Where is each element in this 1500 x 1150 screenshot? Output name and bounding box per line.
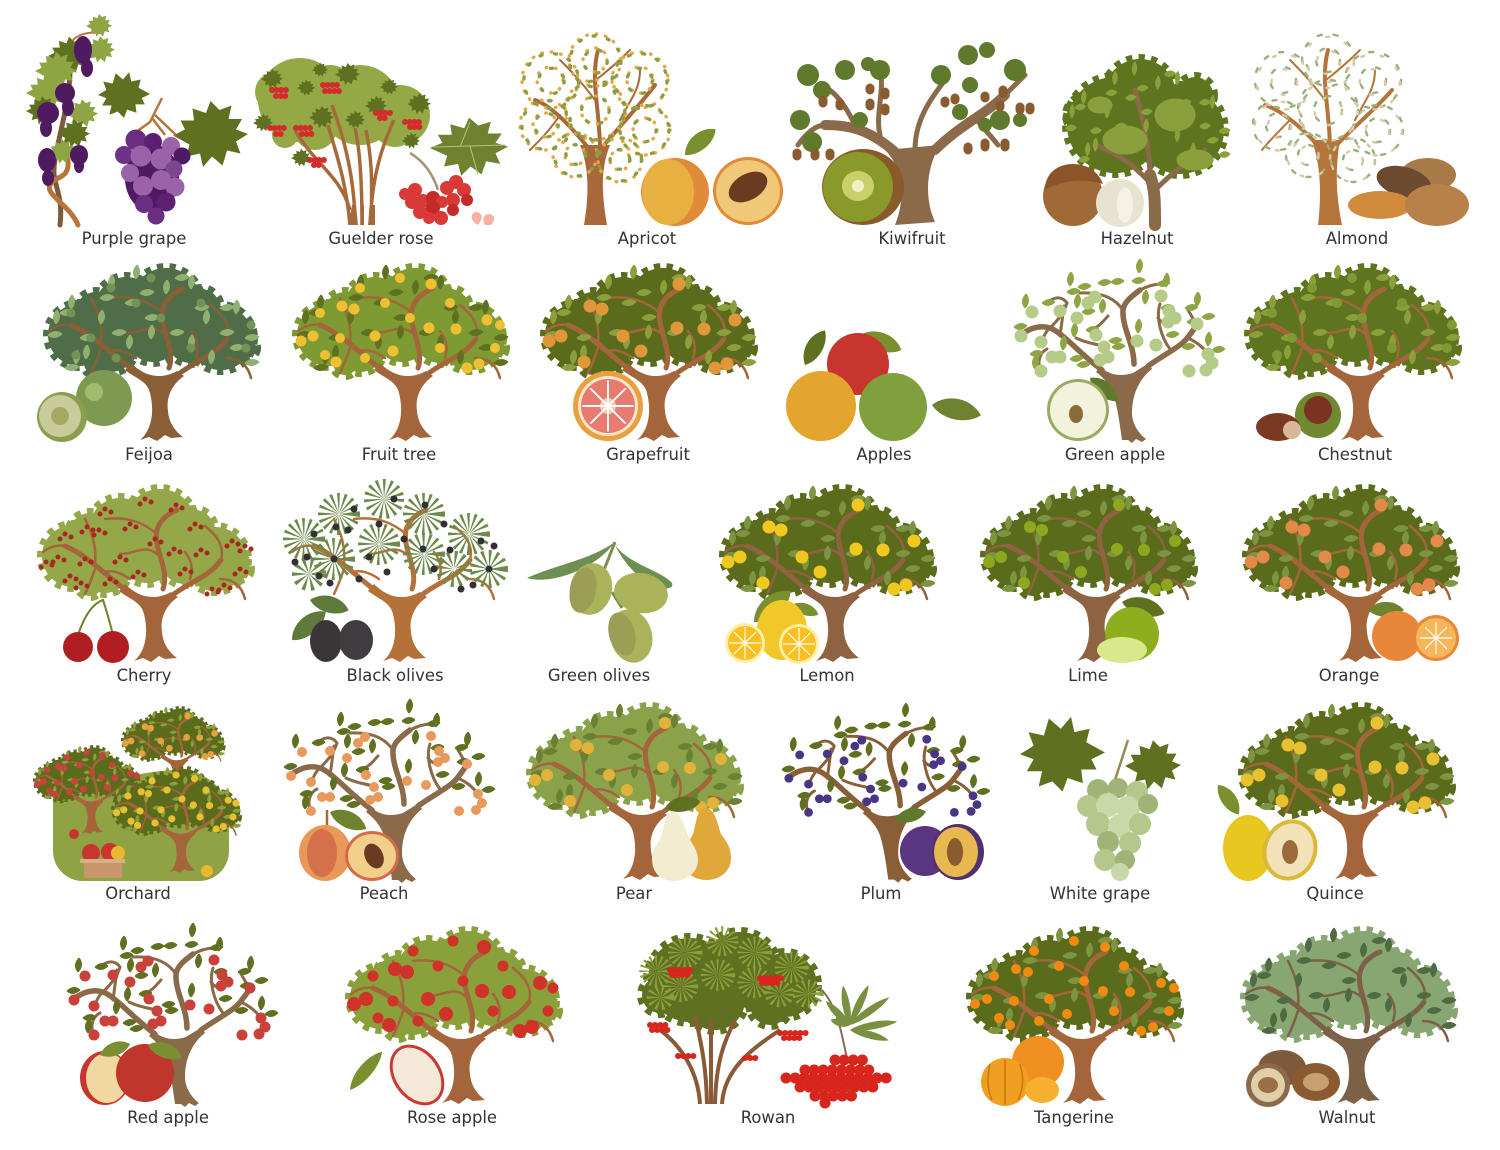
tree art: [297, 266, 507, 441]
plum fruit: [893, 805, 984, 880]
label: Peach: [360, 884, 408, 903]
small grape clusters: [37, 36, 93, 186]
stems: [604, 542, 622, 608]
blossom foliage: [520, 34, 670, 182]
lime fruit: [1097, 592, 1167, 663]
label: Apricot: [618, 229, 677, 248]
red clusters: [650, 970, 808, 1058]
tangerines: [981, 1036, 1064, 1106]
tree: Tangerine: [971, 929, 1181, 1127]
black olives: [286, 591, 373, 662]
tree: Rose apple: [344, 931, 558, 1127]
tree art: [724, 487, 934, 662]
branches: [1262, 50, 1392, 225]
tree art: [350, 931, 558, 1104]
orange fruit: [1368, 602, 1459, 661]
label: Fruit tree: [362, 445, 436, 464]
label: Almond: [1326, 229, 1388, 248]
yellow fruit tree: [114, 768, 240, 873]
label: Rowan: [741, 1108, 795, 1127]
chestnuts: [1256, 392, 1341, 441]
label: Orchard: [105, 884, 171, 903]
branches: [530, 50, 655, 225]
red berries: [399, 175, 473, 225]
pear fruit: [652, 794, 731, 881]
vine leaves: [26, 14, 115, 164]
rowan sprig: [822, 983, 898, 1062]
tree art: [1015, 260, 1224, 443]
hanging kiwis: [797, 88, 1030, 156]
label: Quince: [1306, 884, 1364, 903]
trunk: [1095, 90, 1205, 225]
shrub berries: [270, 85, 423, 165]
tree: Guelder rose: [253, 58, 508, 248]
label: Plum: [861, 884, 901, 903]
almonds: [1348, 158, 1469, 226]
petals: [472, 212, 494, 225]
scene: Orchard: [36, 707, 240, 903]
green apple: [859, 373, 927, 441]
tree art: [545, 266, 755, 441]
label: Rose apple: [407, 1108, 497, 1127]
tree: Green apple: [1015, 260, 1224, 464]
quince fruit: [1212, 780, 1326, 888]
kiwi fruit: [822, 149, 904, 225]
tree art: [48, 266, 258, 441]
tree art: [1243, 705, 1453, 880]
walnuts: [1246, 1050, 1340, 1107]
tree art: [531, 705, 741, 880]
tree: Hazelnut: [1043, 59, 1229, 248]
lighter foliage: [1066, 63, 1229, 170]
olive leaves: [527, 542, 672, 589]
stems: [295, 105, 394, 225]
tree: Apricot: [520, 34, 783, 248]
label: Tangerine: [1033, 1108, 1114, 1127]
cherries: [63, 600, 129, 663]
tree art: [285, 700, 494, 883]
tree: Peach: [285, 700, 494, 903]
label: Green apple: [1065, 445, 1165, 464]
tree: Cherry: [41, 489, 251, 685]
tree art: [41, 489, 251, 662]
tree art: [68, 924, 277, 1107]
label: Lime: [1068, 666, 1108, 685]
apple tree: [36, 746, 140, 834]
tree: Pear: [531, 705, 741, 903]
shrub leaves: [253, 63, 431, 166]
label: White grape: [1050, 884, 1150, 903]
label: Apples: [856, 445, 912, 464]
vine trunk: [49, 33, 100, 225]
kiwi leaves: [790, 42, 1027, 152]
label: Guelder rose: [328, 229, 434, 248]
tree art: [292, 489, 498, 662]
tree art: [1247, 487, 1457, 662]
canopy: [642, 932, 817, 1030]
label: Red apple: [127, 1108, 209, 1127]
big grape bunch: [115, 130, 190, 224]
label: Orange: [1319, 666, 1379, 685]
label: Feijoa: [125, 445, 173, 464]
tree: Rowan: [642, 932, 898, 1127]
label: Kiwifruit: [878, 229, 946, 248]
canopy: [1067, 59, 1224, 174]
stems: [660, 1015, 780, 1104]
leaves: [797, 326, 983, 425]
tree: Red apple: [68, 924, 277, 1127]
tree art: [985, 487, 1195, 662]
group: Green olives: [527, 542, 672, 685]
tree: Purple grape: [26, 14, 248, 248]
tree: Walnut: [1245, 929, 1455, 1127]
apricot fruit: [641, 122, 783, 226]
green hill: [53, 770, 229, 881]
tree: Fruit tree: [297, 266, 507, 464]
sparse leaves: [1253, 34, 1403, 182]
grape leaves: [1020, 717, 1181, 792]
tree: Plum: [783, 704, 989, 903]
label: Pear: [616, 884, 652, 903]
tree: Black olives: [286, 489, 498, 685]
tree art: [1245, 929, 1455, 1104]
grapefruit: [573, 371, 643, 441]
white grape bunch: [1077, 778, 1158, 881]
label: Grapefruit: [606, 445, 690, 464]
group: Apples: [786, 326, 983, 464]
big grape leaves: [173, 101, 248, 167]
lemons: [725, 583, 820, 664]
label: Lemon: [799, 666, 855, 685]
label: Walnut: [1319, 1108, 1376, 1127]
tree: Quince: [1212, 705, 1453, 903]
label: Green olives: [548, 666, 650, 685]
pale leaflets: [647, 934, 815, 1003]
tree: Chestnut: [1249, 266, 1459, 464]
red apple: [827, 333, 889, 395]
yellow apple: [786, 371, 856, 441]
tree art: [971, 929, 1181, 1104]
peach fruit: [299, 804, 399, 881]
tree: Lemon: [724, 487, 934, 685]
olives: [565, 559, 671, 668]
basket of fruit: [80, 843, 125, 878]
tree art: [1249, 266, 1459, 441]
tree: Lime: [985, 487, 1195, 685]
tree: Feijoa: [37, 266, 258, 464]
shrub foliage: [255, 58, 430, 150]
feijoa fruit: [37, 370, 132, 442]
rose apple fruit: [344, 1034, 456, 1116]
red apple fruit: [80, 1037, 185, 1105]
label: Black olives: [346, 666, 444, 685]
White grape: [1020, 717, 1181, 903]
trunk and branches: [798, 70, 1025, 225]
label: Purple grape: [82, 229, 186, 248]
tree: Orange: [1247, 487, 1459, 685]
big leaf: [430, 118, 508, 176]
label: Chestnut: [1318, 445, 1393, 464]
tree: Kiwifruit: [790, 42, 1030, 248]
tree: Almond: [1253, 34, 1469, 248]
hazelnuts: [1043, 164, 1144, 227]
fallen fruit: [69, 829, 213, 877]
tree: Grapefruit: [545, 266, 755, 464]
red berries: [786, 1060, 890, 1103]
orange tree: [123, 707, 224, 791]
tree art: [783, 704, 989, 883]
label: Hazelnut: [1101, 229, 1174, 248]
label: Cherry: [117, 666, 172, 685]
green apple half: [1047, 372, 1123, 441]
